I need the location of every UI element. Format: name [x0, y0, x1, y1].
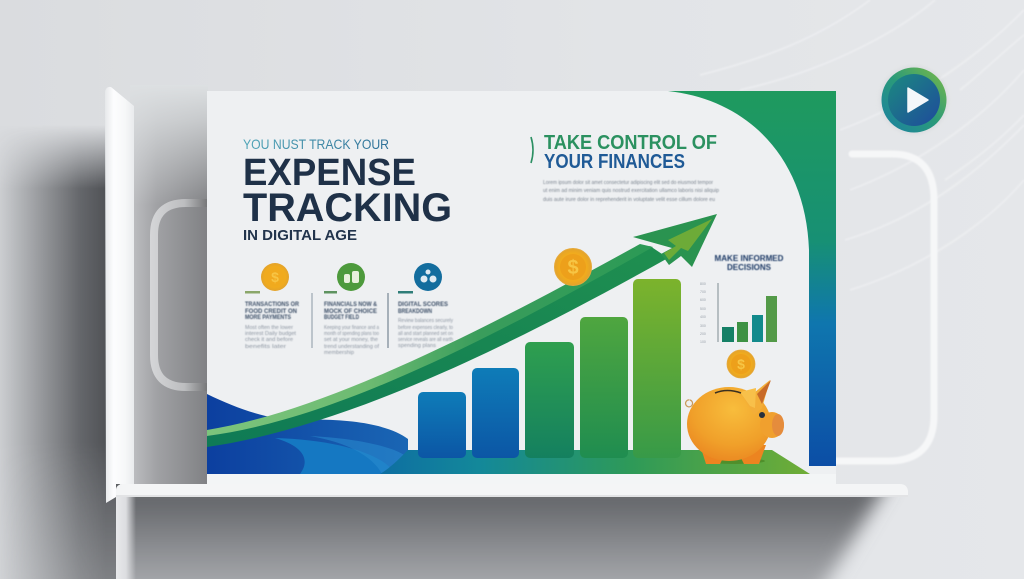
- lower post: [116, 497, 136, 579]
- ground band: [300, 450, 810, 474]
- icon: green badge: [337, 263, 365, 291]
- column 1 heading: FOOD CREDIT ON: [245, 309, 297, 315]
- small bar chart: 800: [700, 282, 706, 286]
- heading: make informed decisions: [714, 254, 784, 272]
- heading: take control: [544, 132, 717, 173]
- column 1 heading: MORE PAYMENTS: [245, 315, 291, 321]
- column 1 heading: TRANSACTIONS OR: [245, 302, 300, 308]
- small bar chart: 200: [700, 332, 706, 336]
- small bar chart: 600: [700, 298, 706, 302]
- column 1 body: [245, 325, 297, 350]
- icon: piggy bank: [686, 380, 784, 464]
- icon: play button: [880, 66, 948, 134]
- column 3 heading: DIGITAL SCORES: [398, 302, 448, 308]
- heading: make informed decisions: MAKE INFORMED: [714, 254, 784, 263]
- shadow: left of side panel: [0, 125, 120, 579]
- column 2 heading: MOCK OF CHOICE: [324, 309, 377, 315]
- column 2 heading: BUDGET FIELD: [324, 315, 360, 321]
- shadow: gutter between side panel and card: [130, 85, 208, 485]
- heading: take control: YOUR FINANCES: [544, 151, 685, 173]
- column 3 body: [398, 318, 453, 349]
- card: [207, 91, 836, 485]
- text block: finances body: ut enim ad minim veniam quis nostrud exercitation ullamco laboris nisi aliquip: [543, 188, 719, 194]
- icon: coin above piggy: [727, 350, 755, 378]
- column divider: [312, 293, 313, 348]
- right handle: [836, 154, 934, 461]
- column 1 body: Most often the lower: [245, 325, 293, 331]
- column 1 heading: [245, 302, 300, 321]
- heading: you must track: YOU NUST TRACK YOUR: [243, 136, 389, 152]
- bracket: [531, 137, 533, 163]
- small bar chart: 500: [700, 307, 706, 311]
- column 2 body: trend understanding of: [324, 344, 380, 350]
- column 2 body: Keeping your finance and a: [324, 325, 379, 331]
- column 1: [245, 263, 300, 350]
- icon: dollar coin on arrow: [554, 248, 592, 286]
- column 2 body: membership: [324, 350, 354, 356]
- shelf: [116, 484, 908, 497]
- left handle: [154, 203, 207, 387]
- column 2 body: set at your money, the: [324, 337, 378, 343]
- text block: finances body: duis aute irure dolor in reprehenderit in voluptate velit esse cillum dolore eu: [543, 197, 715, 203]
- icon: blue badge: [414, 263, 442, 291]
- heading: take control: TAKE CONTROL OF: [544, 132, 717, 154]
- small bar chart: 400: [700, 315, 706, 319]
- column 3 heading: [398, 302, 448, 315]
- heading: in digital age: IN DIGITAL AGE: [243, 227, 357, 244]
- column 3 body: service reveals are all earth: [398, 337, 453, 343]
- column 3 body: all and start planned set on: [398, 331, 453, 337]
- column 2 body: [324, 325, 380, 356]
- bar chart: [418, 279, 681, 458]
- column 2 body: month of spending plans too: [324, 331, 379, 337]
- column 2 heading: FINANCIALS NOW &: [324, 302, 378, 308]
- icon: dollar coin on arrow: $: [567, 257, 579, 279]
- small bar chart: 700: [700, 290, 706, 294]
- shadow: beneath shelf: [126, 497, 894, 579]
- heading: expense: EXPENSE: [243, 152, 416, 194]
- column 2 heading: [324, 302, 378, 321]
- column 3 body: spending plans: [398, 343, 437, 349]
- column 1 body: interest Daily budget: [245, 331, 297, 337]
- column 1 body: benefits later: [245, 344, 286, 350]
- side panel: [105, 87, 134, 503]
- text block: finances body: [543, 180, 719, 203]
- column 3: [398, 263, 453, 349]
- column 1 body: check it and before: [245, 337, 293, 343]
- icon: coin: $: [271, 269, 279, 285]
- column divider: [388, 293, 389, 348]
- growth arrow: [207, 214, 717, 447]
- heading: make informed decisions: DECISIONS: [727, 263, 772, 272]
- small bar chart: [700, 282, 777, 344]
- decorative wave lines top right: [700, 0, 1024, 290]
- column 3 body: before expenses clearly, to: [398, 325, 453, 331]
- column 3 heading: BREAKDOWN: [398, 309, 432, 315]
- small bar chart: 300: [700, 324, 706, 328]
- column 3 body: Review balances securely: [398, 318, 453, 324]
- text block: finances body: Lorem ipsum dolor sit amet consectetur adipiscing elit sed do eiusmod tempor: [543, 180, 713, 186]
- blue wave: [207, 394, 408, 474]
- column 2: [324, 263, 380, 356]
- heading: tracking: TRACKING: [243, 186, 452, 230]
- small bar chart: 100: [700, 340, 706, 344]
- icon: coin above piggy: $: [737, 356, 745, 372]
- panel: green-blue corner: [668, 91, 836, 466]
